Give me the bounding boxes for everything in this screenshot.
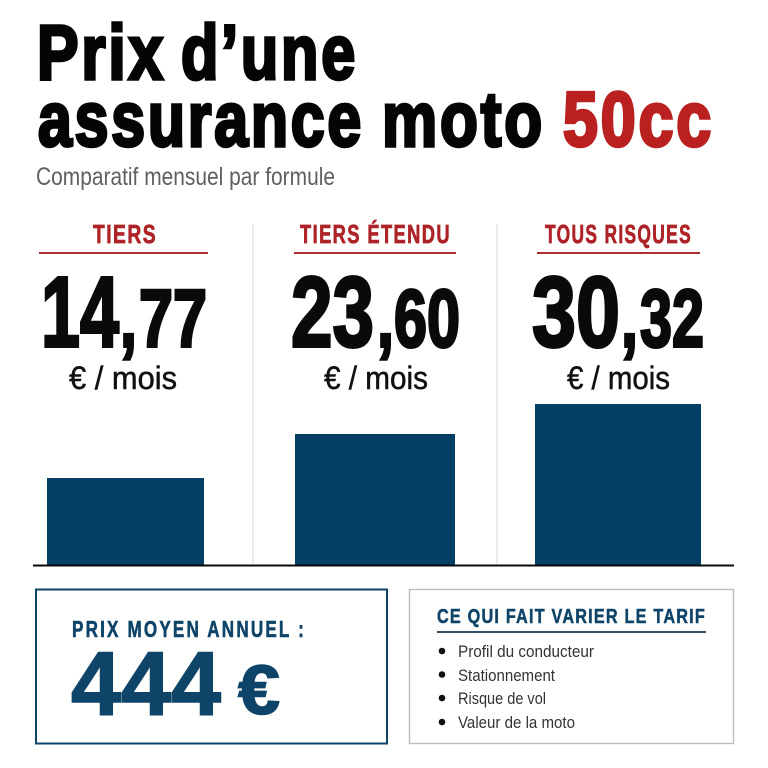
value: 444 euros: € bbox=[238, 651, 280, 729]
price: tous risques: 30 bbox=[532, 256, 620, 368]
title: 50cc bbox=[563, 77, 714, 163]
bar: tiers bbox=[47, 478, 204, 565]
price: tiers: , bbox=[120, 274, 137, 364]
list: facteurs: Valeur de la moto bbox=[458, 713, 575, 732]
bar: tiers etendu bbox=[295, 434, 455, 565]
price: tiers: 14 bbox=[41, 256, 119, 368]
title: Prix bbox=[37, 10, 166, 96]
panel: tous risques bbox=[532, 219, 704, 565]
bar: tous risques bbox=[535, 404, 701, 565]
subtitle: Comparatif mensuel par formule bbox=[36, 163, 335, 191]
heading: tiers: TIERS bbox=[93, 219, 157, 249]
price: tiers: 77 bbox=[139, 274, 207, 364]
title: d’une bbox=[181, 10, 358, 96]
list: facteurs: Risque de vol bbox=[458, 689, 546, 708]
price: tiers bbox=[41, 256, 207, 368]
title: assurance bbox=[38, 77, 364, 163]
value: 444 euros: 444 bbox=[71, 634, 221, 734]
heading: tiers etendu: TIERS ÉTENDU bbox=[300, 219, 451, 249]
heading: facteurs: CE QUI FAIT VARIER LE TARIF bbox=[437, 606, 706, 628]
list: facteurs: Stationnement bbox=[458, 666, 555, 685]
price: tiers etendu: 23 bbox=[291, 256, 374, 368]
price: tous risques: 32 bbox=[640, 274, 704, 364]
panel: tiers etendu bbox=[291, 219, 460, 565]
price: tiers etendu bbox=[291, 256, 460, 368]
price: tous risques bbox=[532, 256, 704, 368]
panel: prix moyen annuel bbox=[36, 590, 387, 744]
list: facteurs bbox=[439, 642, 594, 732]
label: prix moyen annuel: PRIX MOYEN ANNUEL : bbox=[72, 616, 306, 642]
heading: tous risques: TOUS RISQUES bbox=[545, 219, 692, 249]
panel: ce qui fait varier le tarif bbox=[410, 590, 734, 744]
unit: tous risques: € / mois bbox=[567, 360, 670, 396]
price: tous risques: , bbox=[621, 274, 638, 364]
unit: tiers etendu: € / mois bbox=[324, 360, 428, 396]
price: tiers etendu: , bbox=[377, 274, 394, 364]
price: tiers etendu: 60 bbox=[394, 274, 460, 364]
title: moto bbox=[382, 77, 545, 163]
list: facteurs: Profil du conducteur bbox=[458, 642, 594, 661]
title bbox=[37, 10, 714, 163]
panel: tiers bbox=[39, 219, 208, 565]
unit: tiers: € / mois bbox=[69, 360, 177, 396]
